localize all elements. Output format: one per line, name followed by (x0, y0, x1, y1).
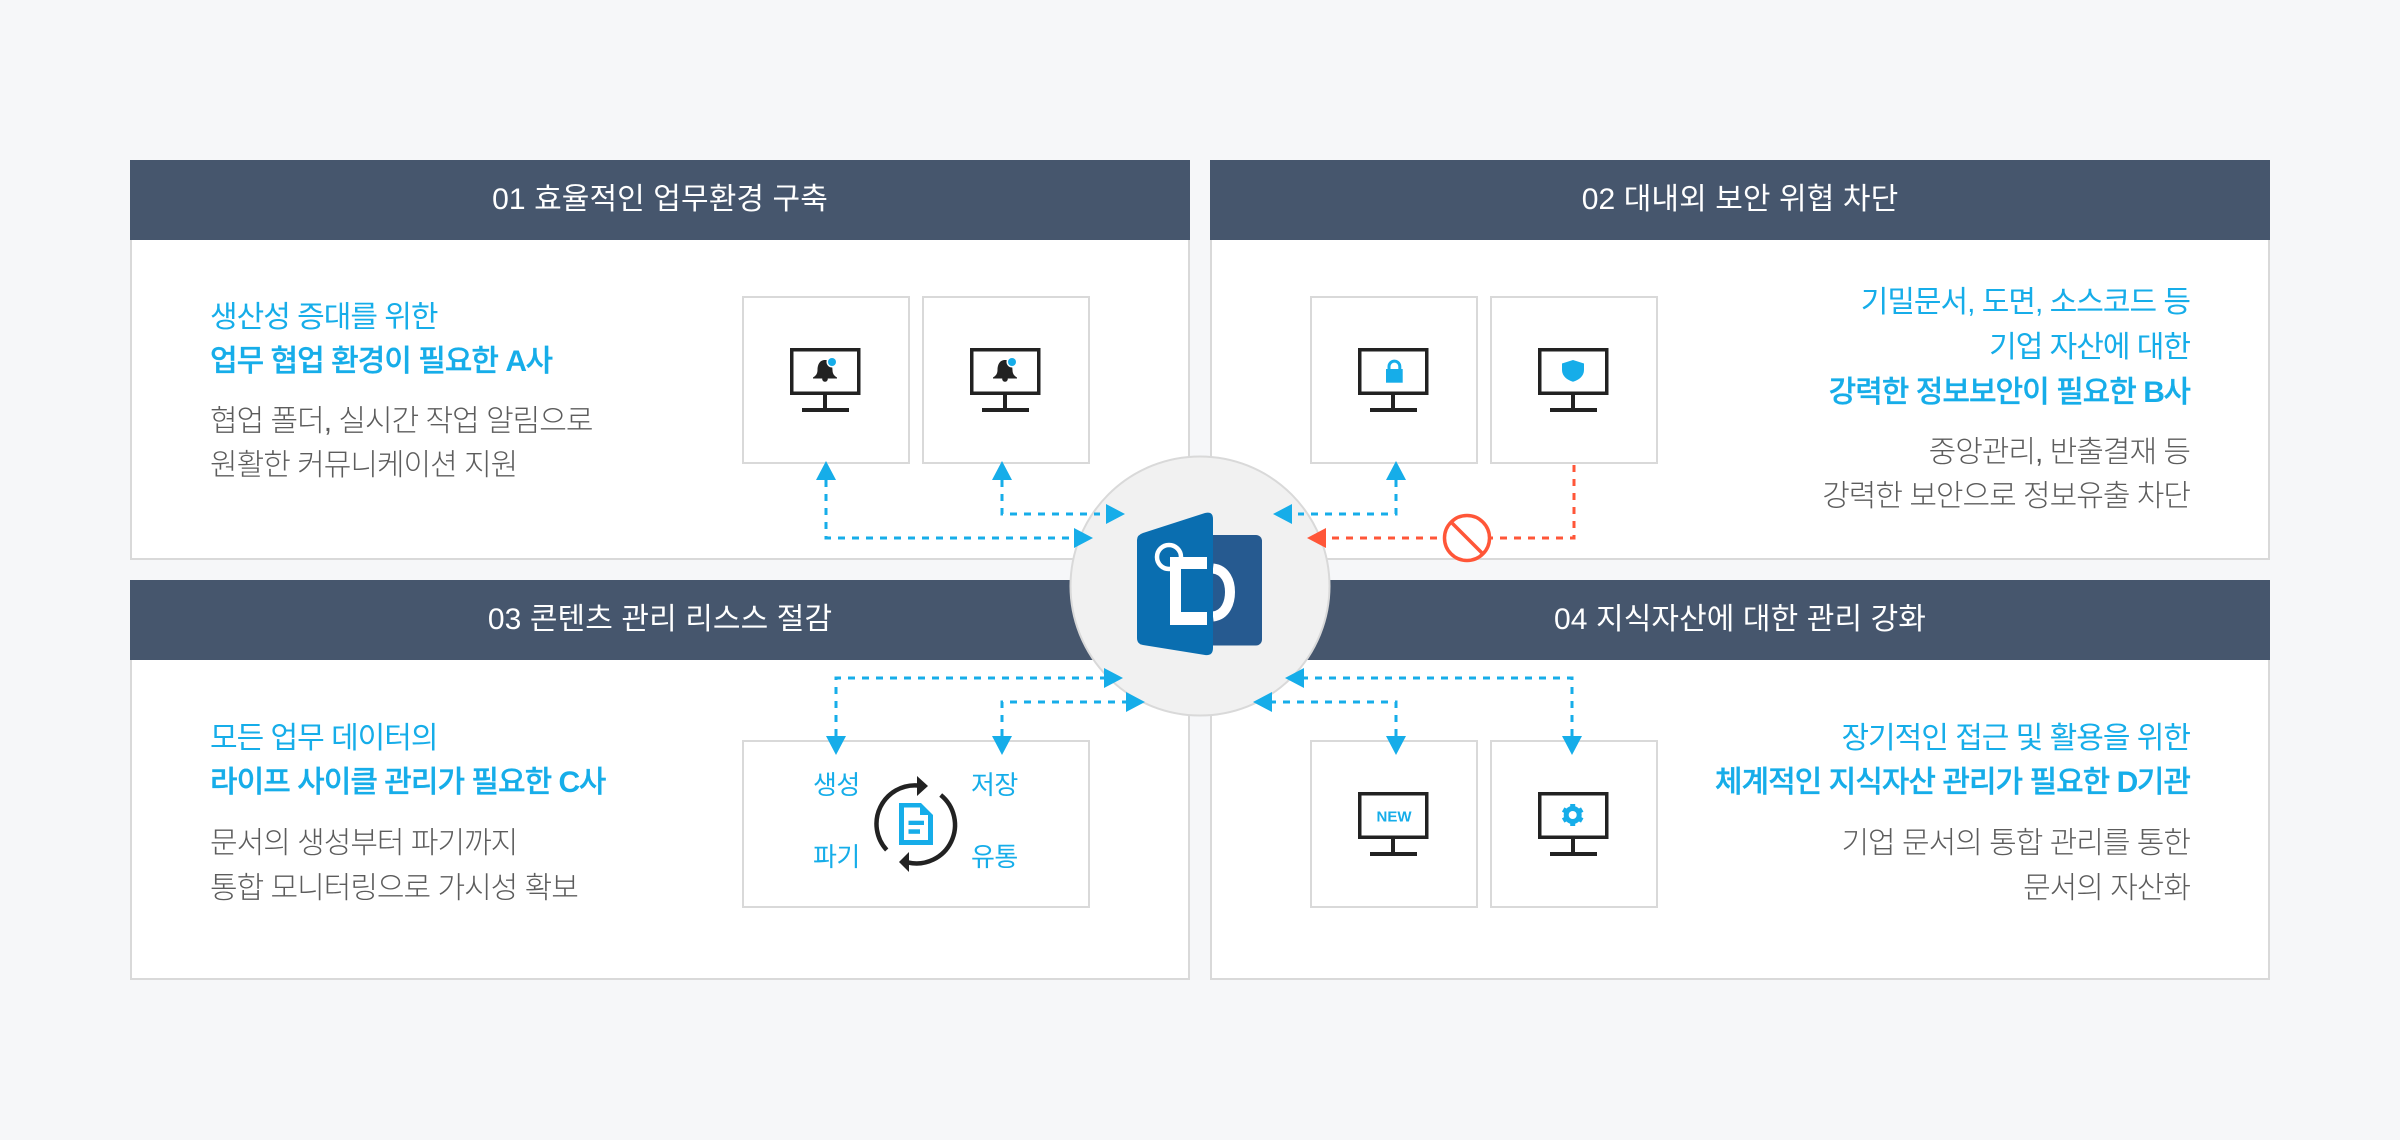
icon box: monitor with NEW (1310, 740, 1478, 908)
text block 03: 라이프 사이클 관리가 필요한 C사 (210, 766, 605, 799)
text block 04: 장기적인 접근 및 활용을 위한 (1841, 722, 2190, 755)
panel 04: knowledge asset management (1210, 580, 2270, 980)
heading 01 (130, 160, 1190, 240)
heading 02 (1210, 160, 2270, 240)
heading 03: 03 콘텐츠 관리 리스스 절감 (488, 603, 832, 636)
heading 04: 04 지식자산에 대한 관리 강화 (1554, 603, 1926, 636)
icon: prohibited sign (1444, 516, 1490, 560)
text block 01: 협업 폴더, 실시간 작업 알림으로 (210, 405, 592, 438)
heading 01: 01 효율적인 업무환경 구축 (492, 183, 828, 216)
text block 01: 생산성 증대를 위한 (210, 301, 437, 334)
text block 02 (1822, 286, 2190, 513)
arrow: panel 01 box 2 to hub (992, 461, 1125, 524)
icon box: monitor with gear (1490, 740, 1658, 908)
arrow: panel 01 box 1 to hub (816, 461, 1093, 548)
label: distribute: 유통 (971, 842, 1018, 872)
icon box: monitor with lock (1310, 296, 1478, 464)
icon: cycle arrows and document (874, 776, 958, 872)
heading 04 (1210, 580, 2270, 660)
text block 02: 강력한 보안으로 정보유출 차단 (1822, 480, 2190, 513)
text block 04 (1715, 722, 2190, 905)
label: store: 저장 (971, 770, 1018, 800)
blocked arrow: panel 02 box 2 to hub (1307, 465, 1574, 560)
text block 01: 원활한 커뮤니케이션 지원 (210, 449, 517, 482)
arrow: panel 04 right to hub (1285, 668, 1582, 755)
arrow: panel 03 left to hub (826, 668, 1123, 755)
icon box: monitor with NEW: NEW (1376, 809, 1412, 826)
text block 03: 문서의 생성부터 파기까지 (210, 827, 517, 860)
text block 01 (210, 301, 592, 482)
text block 02: 중앙관리, 반출결재 등 (1929, 436, 2190, 469)
label: destroy: 파기 (813, 842, 860, 872)
icon box: monitor with shield (1490, 296, 1658, 464)
panel 02: security threat blocking (1210, 160, 2270, 560)
icon box: document life cycle (742, 740, 1090, 908)
label: create: 생성 (813, 770, 860, 800)
heading 03 (130, 580, 1190, 660)
arrow: panel 03 right to hub (992, 692, 1145, 755)
text block 04: 문서의 자산화 (2023, 872, 2190, 905)
heading 02: 02 대내외 보안 위협 차단 (1582, 183, 1898, 216)
text block 04: 기업 문서의 통합 관리를 통한 (1841, 827, 2190, 860)
panel 03: content management risk reduction (130, 580, 1190, 980)
panel 01: collaboration environment (130, 160, 1190, 560)
icon box: monitor with bell 2 (922, 296, 1090, 464)
text block 04: 체계적인 지식자산 관리가 필요한 D기관 (1715, 766, 2190, 799)
text block 02: 기밀문서, 도면, 소스코드 등 (1861, 286, 2190, 319)
text block 02: 강력한 정보보안이 필요한 B사 (1829, 376, 2190, 409)
text block 03: 모든 업무 데이터의 (210, 722, 437, 755)
logo (1137, 513, 1262, 655)
icon box: monitor with bell 1 (742, 296, 910, 464)
text block 01: 업무 협업 환경이 필요한 A사 (210, 345, 552, 378)
arrow: panel 02 box 1 to hub (1273, 461, 1406, 524)
arrow: panel 04 left to hub (1253, 692, 1406, 755)
text block 03: 통합 모니터링으로 가시성 확보 (210, 872, 578, 905)
text block 03 (210, 722, 606, 905)
central hub circle (1070, 456, 1330, 716)
text block 02: 기업 자산에 대한 (1989, 331, 2190, 364)
